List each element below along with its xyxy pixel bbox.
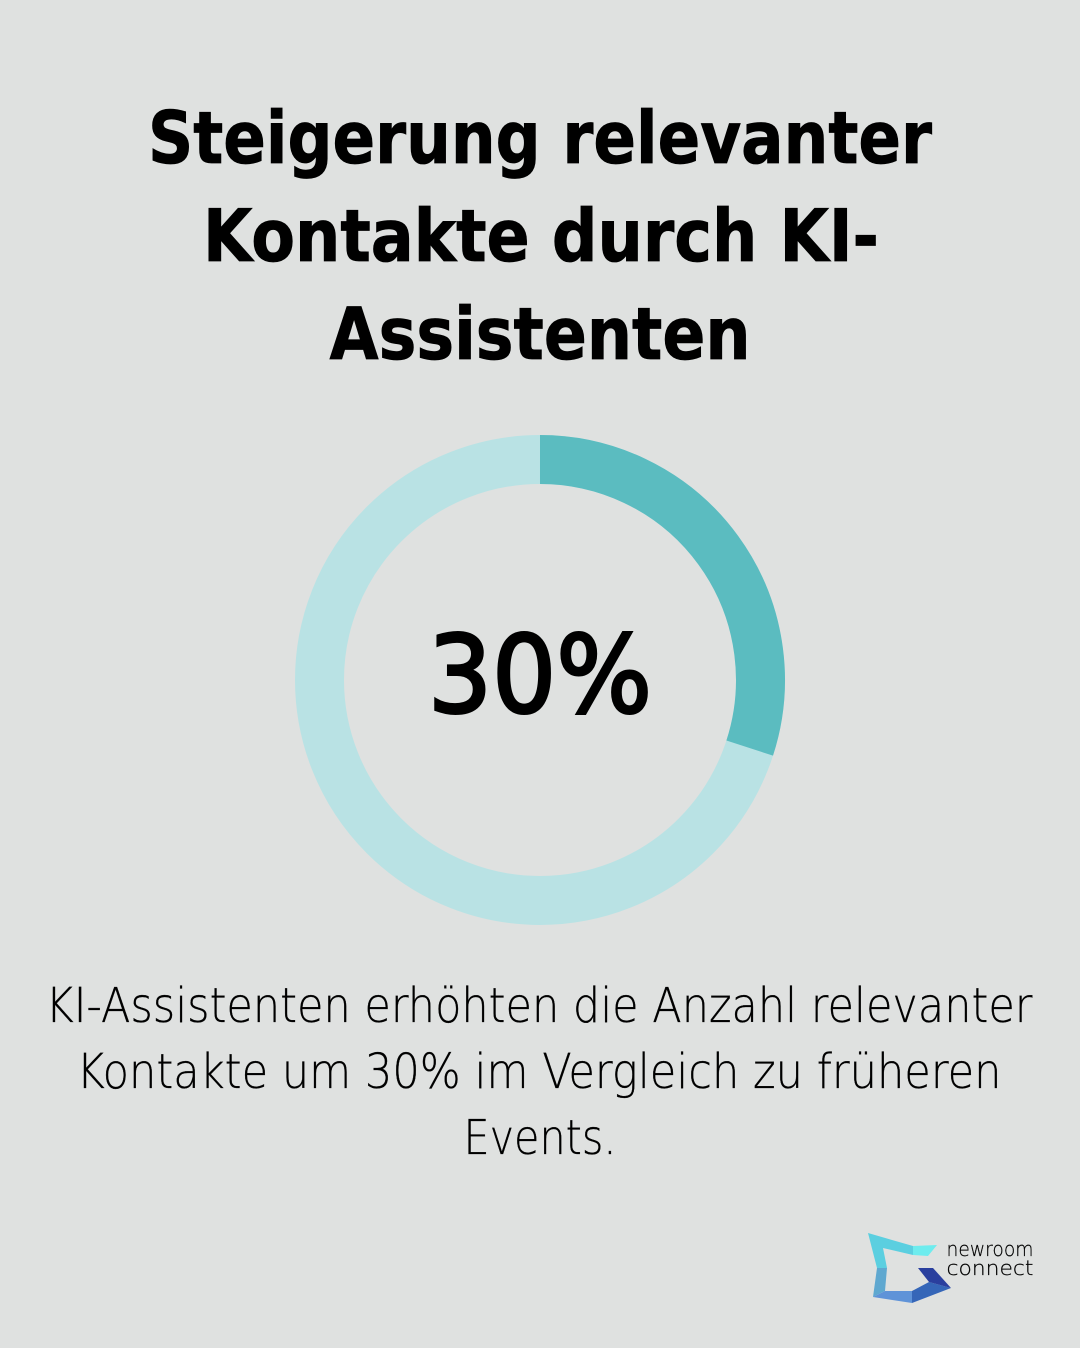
logo wordmark: connect [946, 1256, 1034, 1280]
logo wordmark [946, 1237, 1034, 1280]
description text: Kontakte um 30% im Vergleich zu früheren [76, 1044, 1002, 1100]
icon: logo mark [868, 1233, 951, 1303]
logo wordmark: newroom [946, 1237, 1034, 1261]
description text [46, 978, 1033, 1166]
title: Steigerung relevanter [148, 96, 932, 180]
title [148, 96, 932, 376]
title: Assistenten [330, 292, 750, 376]
logo: newroom connect [868, 1233, 1034, 1303]
donut chart [320, 460, 760, 900]
big number: 30%: 30% [428, 614, 652, 738]
description text: Events. [464, 1110, 616, 1166]
title: Kontakte durch KI- [203, 194, 879, 278]
